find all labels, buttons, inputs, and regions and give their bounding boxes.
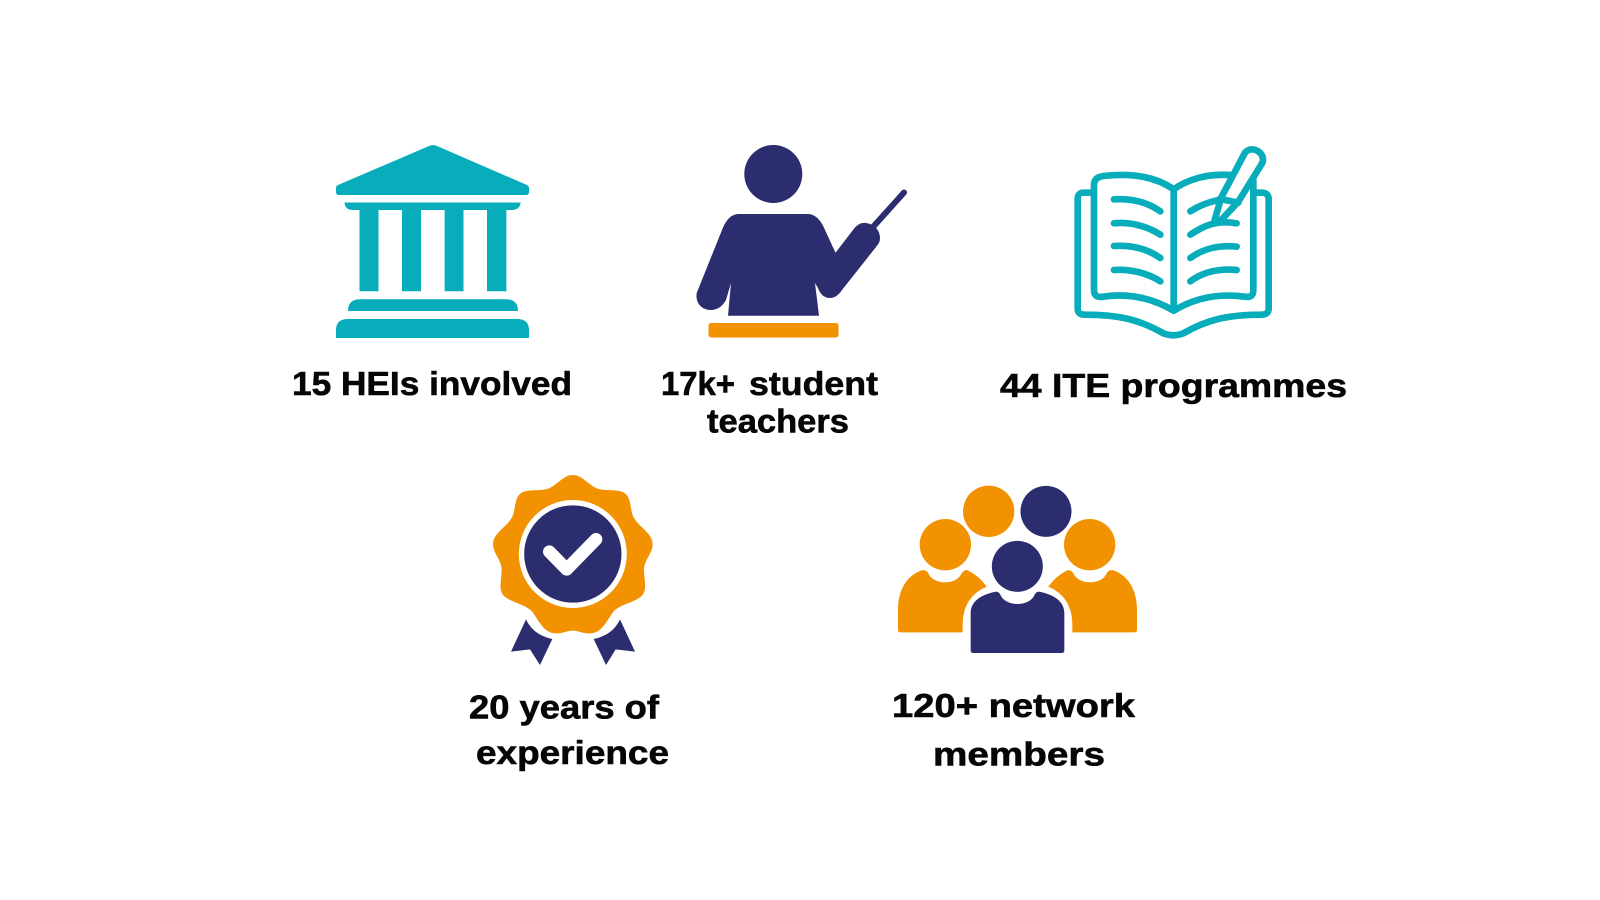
label: 44 ITE programmes: 44 ITE programmes — [1000, 368, 1347, 405]
label: experience: experience — [476, 735, 669, 772]
icon: award rosette with check — [493, 475, 653, 665]
stat: 17k+ student teachers — [661, 145, 904, 440]
icon: group of people — [898, 486, 1137, 653]
icon: open book and pen — [1078, 149, 1269, 335]
icon: institution building — [336, 145, 529, 338]
stat: 44 ITE programmes — [1000, 149, 1347, 405]
label: members: members — [933, 736, 1105, 774]
label: 17k+ student: student — [749, 366, 878, 403]
label: 120+ network: 120+ network — [892, 688, 1135, 725]
stat: 20 years of experience — [469, 475, 669, 772]
label: 15 HEIs involved: 15 HEIs involved — [292, 366, 572, 403]
stat: 15 HEIs involved — [292, 145, 572, 403]
label: 17k+ student: 17k+ — [661, 366, 735, 403]
label: 20 years of: 20 years of — [469, 690, 660, 726]
label: teachers: teachers — [707, 404, 849, 440]
icon: teacher with pointer — [696, 145, 904, 338]
stat: 120+ network members — [892, 486, 1137, 774]
